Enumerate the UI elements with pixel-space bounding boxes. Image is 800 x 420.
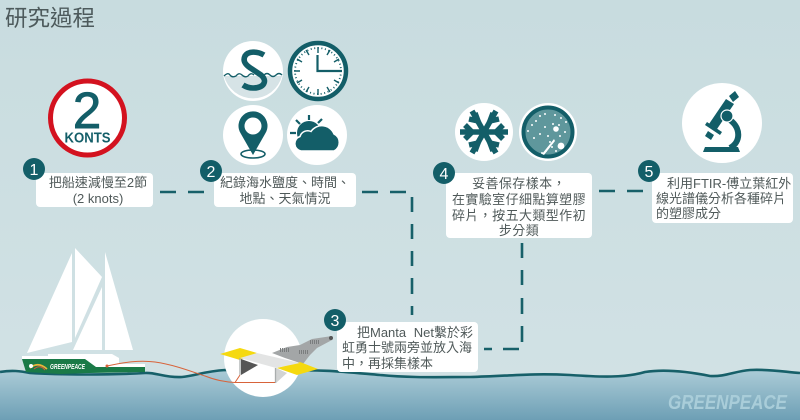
- step 5: 5: [645, 164, 654, 181]
- step 1: [23, 158, 153, 207]
- title: 研究過程: [5, 6, 95, 31]
- step 4: 妥善保存樣本，: [472, 176, 566, 191]
- step 4: 步分類: [499, 223, 539, 238]
- icon: 2 knots speed sign: 2: [73, 82, 101, 139]
- step 3: [324, 309, 478, 372]
- step 1: 1: [30, 162, 39, 179]
- net tail: [272, 336, 333, 364]
- step 5: 利用FTIR-傅立葉紅外: [667, 176, 791, 191]
- step 5: 的塑膠成分: [656, 206, 721, 221]
- step 5: 線光譜儀分析各種碎片: [656, 191, 786, 206]
- hull: GREENPEACE: [50, 364, 85, 371]
- icon: Manta Net: [106, 319, 333, 397]
- step 4: 4: [440, 166, 449, 183]
- sea with wave line: [0, 370, 800, 420]
- step 3: 把Manta Net繫於彩: [357, 325, 473, 340]
- step 2: [200, 160, 356, 207]
- icon: snowflake: [455, 103, 513, 161]
- icon: clock: [290, 43, 346, 99]
- step 3: 3: [331, 313, 340, 330]
- step 4: 碎片，按五大類型作初: [452, 208, 586, 223]
- step 1: (2 knots): [73, 191, 123, 206]
- dashed connectors: [160, 191, 643, 349]
- step 5: [638, 160, 793, 223]
- sails: [27, 248, 133, 353]
- step 2: 2: [207, 164, 216, 181]
- icon: 2 knots speed sign: [50, 81, 124, 155]
- ship: Rainbow Warrior: [22, 248, 145, 374]
- step 3: 虹勇士號兩旁並放入海: [342, 340, 472, 355]
- step 3: 中，再採集樣本: [342, 356, 433, 371]
- icon: 2 knots speed sign: KONTS: [64, 130, 111, 146]
- yellow wings: [220, 348, 318, 375]
- step 2: 地點、天氣情況: [239, 191, 331, 206]
- icon: weather: [287, 105, 347, 165]
- step 2: 紀錄海水鹽度、時間、: [220, 175, 350, 190]
- towing rope: [107, 361, 275, 382]
- icon: microscope: [682, 83, 762, 163]
- icon: location pin: [223, 105, 283, 165]
- step 4: 在實驗室仔細點算塑膠: [452, 192, 586, 207]
- icon: petri dish with plastic fragments: [519, 103, 577, 161]
- icon: salinity: [223, 41, 283, 101]
- step 4: [433, 162, 592, 238]
- step 1: 把船速減慢至2節: [49, 175, 147, 190]
- frame: [240, 353, 300, 368]
